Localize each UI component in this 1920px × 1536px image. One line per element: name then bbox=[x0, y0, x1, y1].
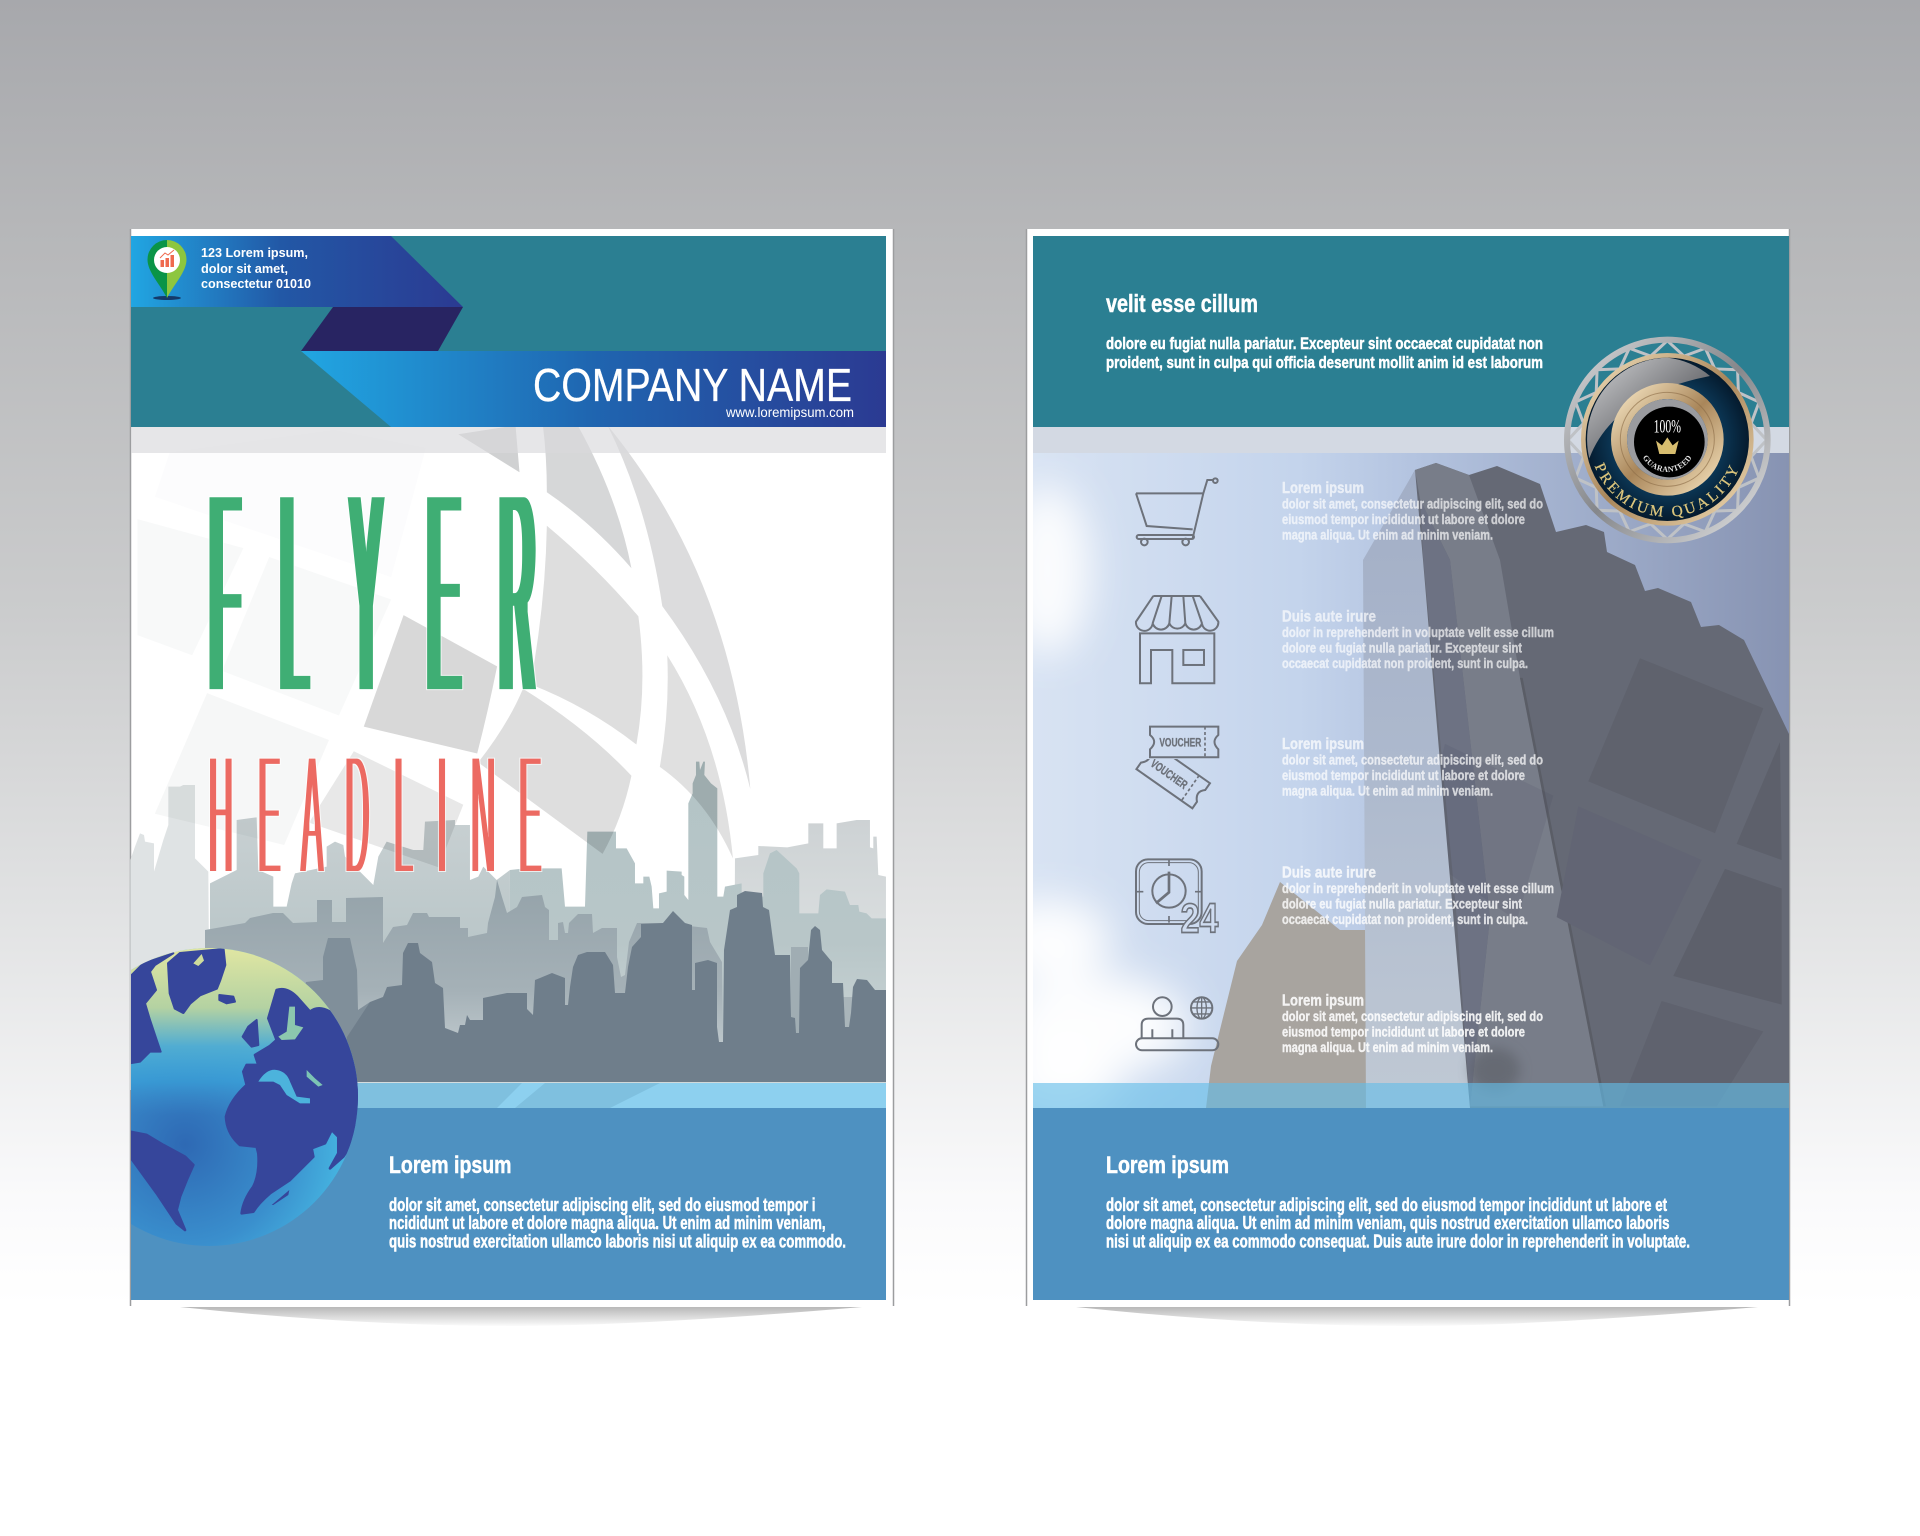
strip watermark tint bbox=[357, 1083, 660, 1108]
list item 5: dolor sit amet, consectetur adipiscing elit, sed do bbox=[1282, 1008, 1543, 1024]
list item 5 bbox=[1282, 992, 1543, 1055]
footer body text: dolore magna aliqua. Ut enim ad minim veniam, quis nostrud exercitation ullamco laboris bbox=[1106, 1213, 1670, 1233]
header body text: dolore eu fugiat nulla pariatur. Excepteur sint occaecat cupidatat non bbox=[1106, 334, 1543, 353]
header body text bbox=[1106, 334, 1543, 372]
premium quality badge: PREMIUM QUALITY bbox=[1594, 462, 1738, 518]
list item 2: Duis aute irure bbox=[1282, 608, 1376, 625]
list item 2: dolor in reprehenderit in voluptate velit esse cillum bbox=[1282, 624, 1554, 640]
title: FLYER: FLYER bbox=[210, 431, 535, 756]
skyline rear layers bbox=[130, 762, 886, 1090]
website: www.loremipsum.com bbox=[725, 404, 854, 420]
footer body text bbox=[1106, 1195, 1690, 1252]
panel: right flyer page bbox=[1026, 229, 1790, 1325]
list item 1 bbox=[1282, 480, 1543, 543]
page sheet bbox=[1026, 229, 1790, 1307]
list item 3: magna aliqua. Ut enim ad minim veniam. bbox=[1282, 783, 1493, 799]
footer body text: ncididunt ut labore et dolore magna aliqua. Ut enim ad minim veniam, bbox=[389, 1213, 826, 1233]
light blue strip bbox=[131, 1083, 886, 1108]
list item 2 bbox=[1282, 608, 1554, 671]
footer body text bbox=[389, 1195, 846, 1252]
icon: vouchers bbox=[1136, 727, 1218, 808]
list item 5: magna aliqua. Ut enim ad minim veniam. bbox=[1282, 1039, 1493, 1055]
icon: vouchers: VOUCHER bbox=[1148, 756, 1191, 792]
list item 4 bbox=[1282, 864, 1554, 927]
page drop shadow bbox=[1076, 1307, 1758, 1326]
address text bbox=[201, 245, 311, 291]
icon: support person and globe bbox=[1136, 997, 1218, 1050]
skyscraper facade shading bbox=[1415, 463, 1782, 1106]
ribbon fold bbox=[301, 307, 463, 351]
panel: left flyer page bbox=[60, 229, 894, 1326]
list item 4: dolor in reprehenderit in voluptate velit esse cillum bbox=[1282, 880, 1554, 896]
footer body text: dolor sit amet, consectetur adipiscing elit, sed do eiusmod tempor i bbox=[389, 1195, 816, 1215]
premium quality badge: 100% bbox=[1654, 417, 1681, 438]
premium quality badge bbox=[1564, 336, 1771, 544]
list item 2: dolore eu fugiat nulla pariatur. Excepteur sint bbox=[1282, 640, 1522, 656]
globe watermark bbox=[137, 425, 750, 867]
list item 1: dolor sit amet, consectetur adipiscing elit, sed do bbox=[1282, 496, 1543, 512]
list item 3: Lorem ipsum bbox=[1282, 736, 1364, 753]
icon: store front bbox=[1136, 596, 1218, 683]
blue footer block bbox=[1033, 1108, 1789, 1300]
list item 2: occaecat cupidatat non proident, sunt in culpa. bbox=[1282, 655, 1528, 671]
list item 1: eiusmod tempor incididunt ut labore et dolore bbox=[1282, 511, 1525, 527]
footer heading: Lorem ipsum bbox=[389, 1152, 512, 1179]
page drop shadow bbox=[180, 1307, 862, 1326]
icon: vouchers: VOUCHER bbox=[1159, 736, 1202, 750]
address text: 123 Lorem ipsum, bbox=[201, 245, 308, 260]
list item 4: Duis aute irure bbox=[1282, 864, 1376, 882]
header teal block bbox=[1033, 236, 1789, 427]
footer body text: quis nostrud exercitation ullamco laboris nisi ut aliquip ex ea commodo. bbox=[389, 1232, 846, 1252]
footer body text: nisi ut aliquip ex ea commodo consequat. Duis aute irure dolor in reprehenderit in voluptate. bbox=[1106, 1232, 1690, 1252]
list item 4: dolore eu fugiat nulla pariatur. Excepteur sint bbox=[1282, 896, 1522, 912]
header teal block bbox=[131, 236, 886, 427]
list item 4: occaecat cupidatat non proident, sunt in culpa. bbox=[1282, 911, 1528, 927]
sky photo bbox=[990, 453, 1789, 1120]
header ribbon top bbox=[131, 236, 463, 307]
footer heading: Lorem ipsum bbox=[1106, 1152, 1229, 1179]
list item 5: eiusmod tempor incididunt ut labore et dolore bbox=[1282, 1024, 1525, 1040]
dark smudge bbox=[1470, 1048, 1520, 1092]
globe bbox=[131, 948, 358, 1246]
company name: COMPANY NAME bbox=[533, 359, 852, 411]
page edges bbox=[130, 229, 894, 1306]
light blue strip bbox=[1033, 1083, 1789, 1108]
header body text: proident, sunt in culpa qui officia deserunt mollit anim id est laborum bbox=[1106, 353, 1543, 372]
header ribbon bottom bbox=[301, 351, 886, 427]
header heading: velit esse cillum bbox=[1106, 290, 1258, 318]
list item 3 bbox=[1282, 736, 1543, 799]
list item 1: magna aliqua. Ut enim ad minim veniam. bbox=[1282, 527, 1493, 543]
icon: map pin bbox=[148, 240, 186, 300]
premium quality badge: GUARANTEED bbox=[1644, 456, 1691, 472]
list item 1: Lorem ipsum bbox=[1282, 480, 1364, 497]
address text: dolor sit amet, bbox=[201, 261, 288, 276]
icon: shopping cart bbox=[1136, 478, 1218, 545]
icon: 24 hour clock bbox=[1136, 859, 1219, 942]
list item 3: eiusmod tempor incididunt ut labore et dolore bbox=[1282, 767, 1525, 783]
list item 3: dolor sit amet, consectetur adipiscing elit, sed do bbox=[1282, 752, 1543, 768]
translucent grey band bbox=[1033, 427, 1789, 453]
blue footer block bbox=[131, 1108, 886, 1300]
skyline front layers bbox=[205, 880, 886, 1082]
list item 5: Lorem ipsum bbox=[1282, 992, 1364, 1010]
tan building bbox=[1206, 882, 1366, 1108]
footer body text: dolor sit amet, consectetur adipiscing elit, sed do eiusmod tempor incididunt ut labore et bbox=[1106, 1195, 1667, 1215]
address text: consectetur 01010 bbox=[201, 276, 311, 291]
page sheet bbox=[130, 229, 894, 1307]
title: HEADLINE: HEADLINE bbox=[209, 717, 541, 913]
icon: 24 hour clock: 24 bbox=[1181, 895, 1219, 942]
skyscraper bbox=[1412, 463, 1789, 1108]
translucent grey band bbox=[131, 427, 886, 453]
glass tower bbox=[1363, 470, 1470, 1108]
page edges bbox=[1026, 229, 1790, 1306]
